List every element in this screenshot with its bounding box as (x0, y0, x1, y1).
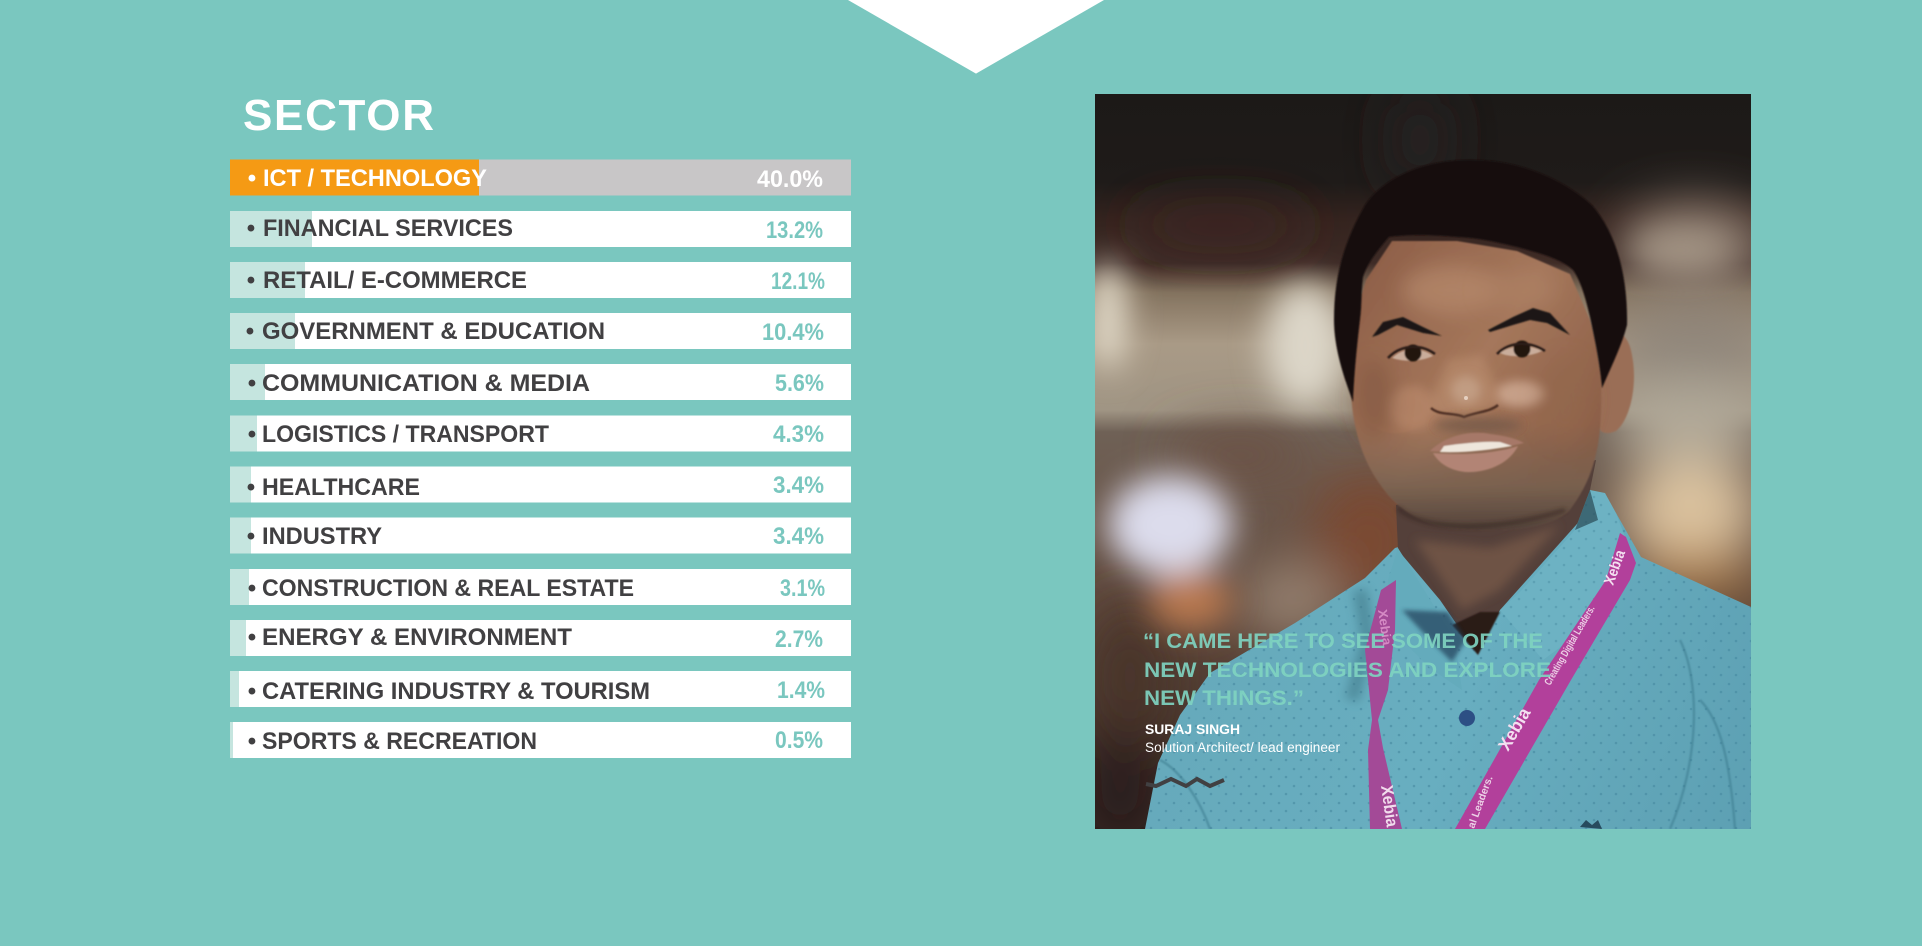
bar row: Construction and real estate: 3.1% (780, 575, 825, 602)
bar row: Construction and real estate: CONSTRUCTION & REAL ESTATE (262, 575, 634, 602)
bar row: ICT / Technology (230, 160, 851, 196)
bar row: ICT / Technology: ICT / TECHNOLOGY (263, 165, 487, 192)
bar row: Construction and real estate: • (248, 575, 256, 602)
right lanyard: Xebia (1601, 547, 1629, 587)
bar row: Sports and recreation: • (248, 728, 256, 755)
bar row: Energy and environment: 2.7% (775, 626, 823, 653)
bar row: Energy and environment (230, 620, 851, 656)
heading: sector: SECTOR (243, 91, 434, 140)
bar row: Healthcare: • (247, 474, 255, 501)
bar row: Healthcare: HEALTHCARE (262, 474, 420, 501)
ear (1597, 333, 1634, 433)
quote (1144, 634, 1550, 705)
bar row: Financial services: 13.2% (766, 217, 823, 244)
photo background (1095, 94, 1751, 829)
eyes (1388, 340, 1545, 362)
bar row: Retail / e-commerce (230, 262, 851, 298)
bar row: Energy and environment: • (248, 624, 256, 651)
right lanyard (1455, 533, 1636, 830)
zigzag mark (1146, 779, 1224, 786)
bar row: Sports and recreation: SPORTS & RECREATION (262, 728, 537, 755)
bar row: Financial services (230, 211, 851, 247)
right lanyard: Creating Digital Leaders. (1542, 604, 1598, 688)
bar row: Logistics / transport: • (248, 421, 256, 448)
left lanyard: Xebia (1375, 608, 1395, 647)
pocket logo mark (1580, 820, 1602, 829)
bar row: Logistics / transport (230, 416, 851, 452)
bar row: Communication and media: • (248, 370, 256, 397)
bar row: Financial services: • (247, 215, 255, 242)
eyebrows (1372, 308, 1570, 337)
bar row: Catering industry and tourism (230, 671, 851, 707)
chin shadow (1398, 508, 1565, 526)
bar row: Industry: INDUSTRY (262, 523, 382, 550)
bar row: Government and education: • (246, 318, 254, 345)
right lanyard: al Leaders. (1466, 774, 1496, 830)
bar row: Government and education (230, 313, 851, 349)
bar row: Government and education: 10.4% (762, 319, 824, 346)
bar row: Retail / e-commerce: • (247, 267, 255, 294)
left lanyard (1365, 580, 1402, 829)
neck (1396, 460, 1596, 655)
bar row: Logistics / transport: 4.3% (773, 421, 824, 448)
quote: NEW THINGS.” (1144, 687, 1304, 710)
attribution: Solution Architect/ lead engineer (1145, 740, 1340, 755)
hair (1334, 160, 1627, 402)
bar row: Catering industry and tourism: 1.4% (777, 677, 825, 704)
mouth (1430, 417, 1524, 472)
bar row: Government and education: GOVERNMENT & EDUCATION (262, 318, 605, 345)
bar row: Industry: 3.4% (773, 523, 824, 550)
bar row: Financial services: FINANCIAL SERVICES (263, 215, 513, 242)
shirt collar (1388, 490, 1630, 726)
quote: NEW TECHNOLOGIES AND EXPLORE (1144, 659, 1551, 682)
left lanyard: Xebia (1377, 784, 1402, 829)
bar row: Industry: • (247, 523, 255, 550)
attribution: SURAJ SINGH (1145, 721, 1240, 737)
face (1351, 241, 1601, 530)
bar row: Healthcare: 3.4% (773, 472, 824, 499)
right lanyard: Xebia (1494, 703, 1535, 754)
shirt (1145, 493, 1751, 829)
bar row: Catering industry and tourism: CATERING INDUSTRY & TOURISM (262, 678, 650, 705)
bar row: ICT / Technology: 40.0% (757, 166, 823, 193)
nose (1430, 355, 1500, 417)
bar row: Industry (230, 518, 851, 554)
bar row: Sports and recreation (230, 722, 851, 758)
bar row: Energy and environment: ENERGY & ENVIRONMENT (262, 624, 572, 651)
panel: portrait photo with quote (1095, 94, 1751, 829)
bar row: Construction and real estate (230, 569, 851, 605)
bar row: ICT / Technology: • (248, 165, 256, 192)
bar row: Retail / e-commerce: 12.1% (771, 268, 825, 295)
bar row: Communication and media: 5.6% (775, 370, 824, 397)
bar row: Retail / e-commerce: RETAIL/ E-COMMERCE (263, 267, 527, 294)
bar row: Communication and media: COMMUNICATION & MEDIA (262, 370, 590, 397)
top white chevron (848, 0, 1104, 74)
bar row: Sports and recreation: 0.5% (775, 727, 823, 754)
bar row: Communication and media (230, 364, 851, 400)
bar row: Healthcare (230, 466, 851, 502)
attribution (1145, 724, 1340, 755)
quote: “I CAME HERE TO SEE SOME OF THE (1143, 630, 1543, 653)
bar row: Catering industry and tourism: • (248, 678, 256, 705)
panel: sector chart (230, 91, 851, 758)
bar row: Logistics / transport: LOGISTICS / TRANSPORT (262, 421, 549, 448)
